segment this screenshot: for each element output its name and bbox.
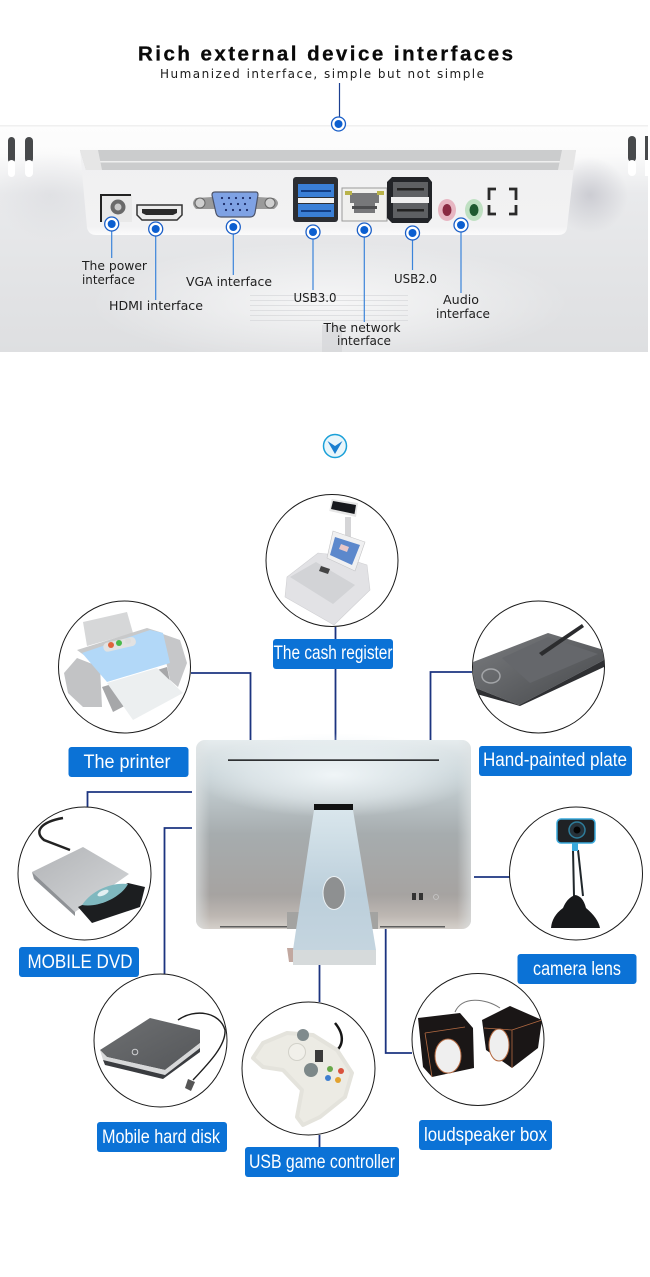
callout: HDMI interface — [109, 222, 203, 313]
callout line: top marker — [332, 83, 346, 131]
connector: drawing tablet — [430, 672, 472, 741]
monitor rear — [194, 733, 474, 965]
connector: camera — [474, 876, 510, 878]
HDMI port — [137, 205, 182, 220]
icon: cash register — [285, 499, 370, 625]
callout: audio interface — [436, 218, 490, 321]
rubber feet right — [628, 136, 648, 176]
power port — [101, 195, 132, 222]
device: camera — [510, 807, 642, 940]
label: hand-painted plate: Hand-painted plate — [483, 750, 627, 771]
device: drawing tablet — [472, 601, 604, 733]
connector: loudspeaker — [386, 921, 412, 1053]
icon: game controller — [253, 1023, 352, 1125]
icon: down chevron circle — [324, 434, 346, 458]
label: printer — [68, 747, 188, 777]
callout: HDMI interface: HDMI interface — [109, 299, 203, 313]
callout: power interface — [81, 217, 147, 287]
callout: USB3.0 — [294, 225, 336, 305]
label: camera lens — [518, 954, 636, 984]
USB 2.0 ports — [387, 177, 432, 223]
lock bracket — [489, 189, 516, 214]
label: USB game controller — [245, 1147, 399, 1177]
label: printer: The printer — [84, 752, 171, 773]
icon: webcam — [551, 819, 600, 928]
title: Rich external device interfaces — [138, 42, 513, 66]
icon: hard disk — [100, 1013, 225, 1091]
callout: power interface: The power — [81, 259, 147, 273]
callout: USB2.0: USB2.0 — [394, 272, 437, 286]
stand — [287, 804, 376, 965]
faint stand reflection — [250, 295, 408, 352]
callout: USB3.0: USB3.0 — [294, 291, 336, 305]
USB 3.0 ports — [293, 177, 338, 222]
device: USB game controller — [242, 1002, 375, 1135]
callout: VGA interface — [186, 220, 272, 289]
label: loudspeaker box: loudspeaker box — [424, 1125, 547, 1146]
device: printer — [58, 601, 190, 733]
callout: network interface: The network — [322, 321, 401, 335]
rubber feet left — [8, 137, 33, 177]
VGA port — [193, 192, 278, 217]
icon: tablet and pen — [473, 624, 604, 706]
label: cash register — [273, 639, 393, 669]
label: cash register: The cash register — [274, 643, 393, 664]
label: hand-painted plate — [479, 746, 632, 776]
device: mobile hard disk — [94, 974, 227, 1107]
device: cash register — [266, 494, 398, 626]
label: mobile DVD: MOBILE DVD — [28, 952, 132, 973]
audio jacks — [438, 199, 483, 221]
connector: cash register — [334, 627, 336, 742]
connector: mobile DVD — [88, 792, 192, 807]
label: mobile hard disk: Mobile hard disk — [102, 1127, 220, 1148]
network port — [342, 188, 387, 221]
device: loudspeaker — [412, 974, 544, 1106]
label: mobile hard disk — [97, 1122, 227, 1152]
subtitle: Humanized interface, simple but not simple — [160, 67, 484, 81]
label: camera lens: camera lens — [533, 959, 621, 980]
callout: power interface: interface — [82, 273, 135, 287]
connector: mobile hard disk — [164, 828, 192, 974]
connector: printer — [191, 673, 250, 741]
icon: speakers — [418, 1000, 542, 1077]
callout: USB2.0 — [394, 226, 437, 286]
icon: DVD drive — [32, 818, 145, 923]
connector: game controller — [318, 925, 320, 1147]
label: mobile DVD — [19, 947, 139, 977]
port recess — [80, 150, 576, 235]
hinge — [287, 912, 378, 929]
rear usb ports — [412, 893, 438, 900]
panel: rear port photo — [0, 125, 648, 352]
callout: network interface — [322, 223, 401, 348]
device: mobile DVD — [18, 807, 151, 940]
callout: network interface: interface — [337, 334, 391, 348]
callout: VGA interface: VGA interface — [186, 275, 272, 289]
label: USB game controller: USB game controller — [249, 1152, 396, 1173]
icon: printer — [64, 612, 187, 720]
callout: audio interface: interface — [436, 307, 490, 321]
label: loudspeaker box — [419, 1120, 552, 1150]
callout: audio interface: Audio — [443, 293, 479, 307]
